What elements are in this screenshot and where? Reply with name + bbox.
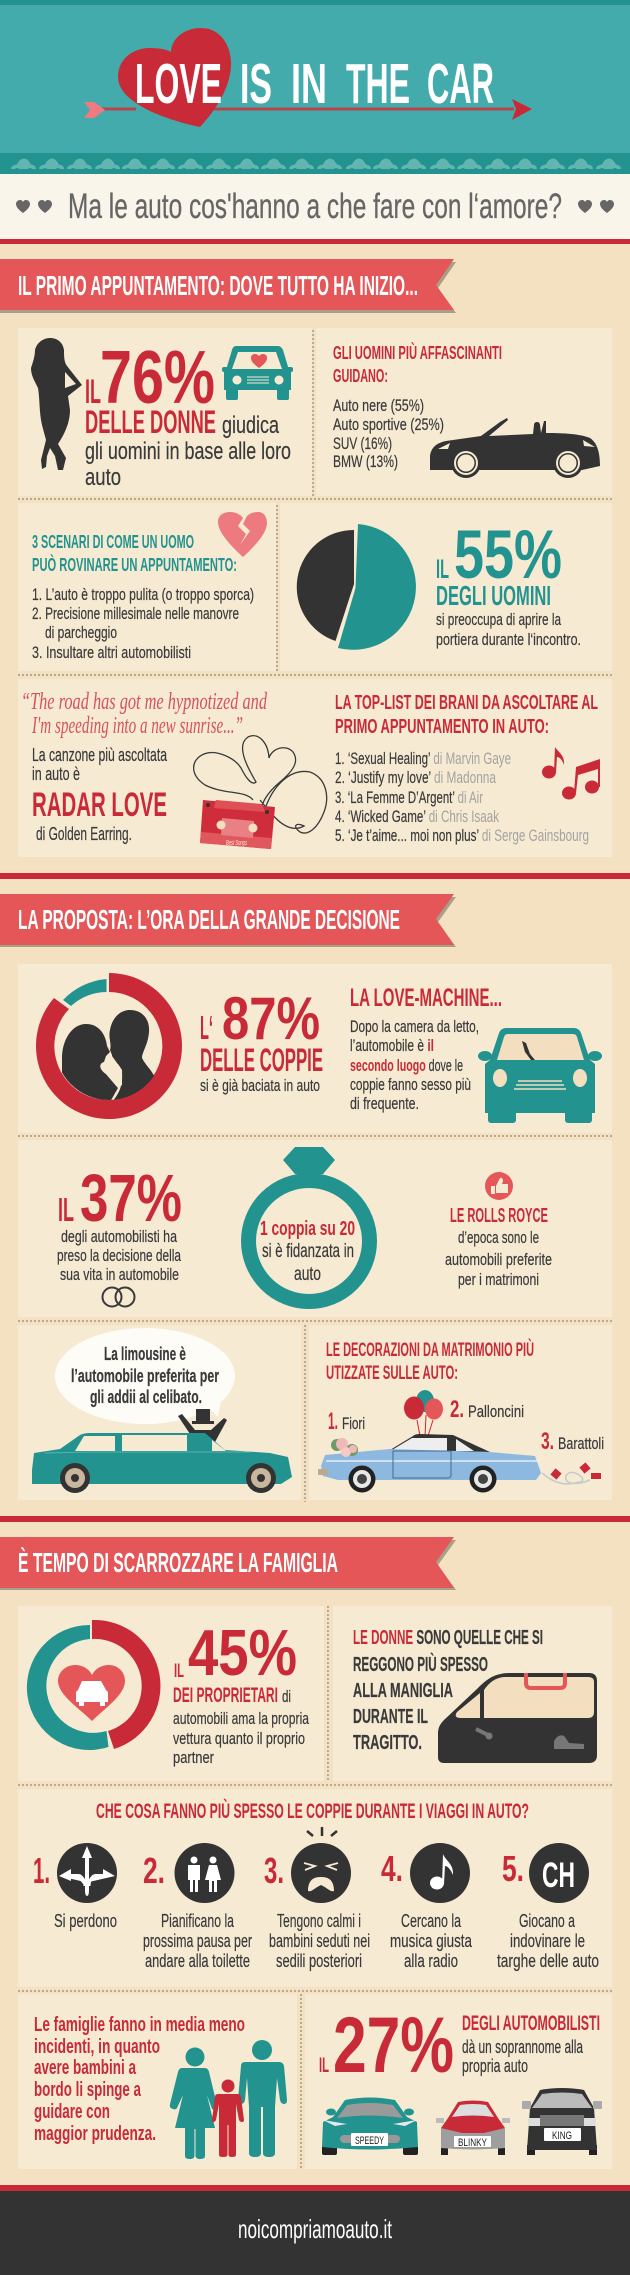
song list: 1. ‘Sexual Healing’ di Marvin Gaye [335,749,511,768]
text: vettura quanto il proprio [173,1729,305,1748]
text: maggior prudenza. [34,2123,156,2145]
item 4: musica: alla radio [404,1951,458,1971]
panel: 55 percent of men [297,516,581,650]
panel: 37 percent of drivers [57,1161,182,1306]
item 1: si perdono: 1. [33,1850,50,1891]
heading [333,342,502,386]
stat: il 76%: IL [85,373,101,411]
text: sua vita in automobile [60,1265,179,1284]
footer [0,2185,630,2275]
text: coppie fanno sesso più [350,1075,471,1094]
title: LOVE [135,52,222,116]
section ribbon: famiglia: È TEMPO DI SCARROZZARE LA FAMIGLIA [18,1547,338,1578]
text: judges men: giudica [222,412,279,439]
item 4: musica: musica giusta [390,1931,473,1951]
song text: di Golden Earring. [36,824,132,844]
icon: teal car speedy [322,2098,418,2155]
text: Le famiglie fanno in media meno [34,2014,245,2036]
icon: black truck king [522,2088,602,2155]
donut chart [36,973,182,1119]
item 2: pausa toilette: andare alla toilette [145,1951,250,1971]
text: secondo luogo dove le [350,1056,463,1075]
title [135,52,494,116]
bubble text: La limousine è [104,1344,186,1364]
icon: wedding rings [102,1288,134,1306]
list: SUV (16%) [333,434,392,453]
numbered list: 2. Precisione millesimale nelle manovre [32,604,239,623]
panel backgrounds and dividers section 2 [18,964,612,1502]
text: DURANTE IL [353,1706,428,1728]
arrow through heart [84,99,532,120]
panel: 3 scenarios [32,512,267,662]
item 3: bambini [264,1827,370,1971]
icon: car door [438,1673,597,1763]
list: Auto nere (55%) [333,396,424,415]
hearts right [578,200,614,213]
text [462,2037,584,2076]
section ribbon: primo appuntamento [0,259,456,313]
numbered list: 1. L’auto è troppo pulita (o troppo sporca) [32,585,254,604]
labels: Fiori [342,1414,365,1433]
icon: black truck king: KING [552,2130,572,2142]
text: propria auto [462,2056,528,2076]
section divider red [0,1516,630,1522]
panel: most charming men [333,342,600,478]
icon: music notes [542,747,600,800]
icon: tape ribbon [194,736,327,833]
text: partner [173,1748,214,1767]
text: ALLA MANIGLIA [353,1680,453,1702]
heading: GLI UOMINI PIÙ AFFASCINANTI [333,342,502,363]
text [353,1627,543,1754]
song text: in auto è [32,764,80,784]
text: automobili ama la propria [173,1709,309,1728]
icon: cans [542,1462,601,1484]
icon: balloons [404,1390,443,1436]
labels: 1. [328,1408,338,1435]
song list [335,749,589,845]
song text: La canzone più ascoltata [32,745,168,765]
panel: engagement ring [248,1147,370,1302]
item 2: pausa toilette: Pianificano la [161,1911,235,1931]
list [333,396,444,471]
bubble text [71,1344,219,1407]
icon: heart with car [58,1665,125,1721]
item 5: targhe [497,1843,599,1971]
text: bordo li spinge a [34,2079,142,2101]
text: avere bambini a [34,2057,137,2079]
panel: love machine [350,984,602,1123]
text: si preoccupa di aprire la [436,610,561,629]
panel: 27 percent nickname [319,2000,602,2155]
header banner [0,0,630,174]
item 2: pausa toilette: prossima pausa per [143,1931,252,1951]
icon: teal car with heart [222,346,293,400]
row of small cars [11,158,621,169]
panel backgrounds and dividers section 1 [18,328,612,857]
heading: UTIZZATE SULLE AUTO: [326,1363,458,1384]
item 1: si perdono [33,1843,117,1931]
stat: il 76%: DELLE DONNE [85,404,216,440]
item 4: musica: 4. [381,1848,403,1889]
icon: grey red car blinky [436,2100,510,2155]
stat: il 76% [85,335,216,440]
quote [21,689,268,739]
stat [173,1616,297,1707]
heading: GUIDANO: [333,366,388,386]
icon: kissing couple [62,1010,160,1102]
item 2: pausa toilette [143,1843,252,1971]
stat: IL [436,554,449,584]
text: incidenti, in quanto [34,2036,160,2058]
stat: DEGLI UOMINI [436,580,551,611]
speech bubble [55,1328,235,1424]
panel: engagement ring: si è fidanzata in [262,1241,354,1262]
text: l’automobile è il [350,1036,434,1055]
icon: teal car with legs [478,1028,602,1123]
panel: 76 percent of women [31,335,293,491]
icon: red cassette: Best Songs [226,840,247,847]
text [436,610,581,649]
stat: 55% [454,516,562,593]
pie chart [297,524,416,650]
icon: family [170,2040,287,2159]
labels: Barattoli [558,1434,604,1453]
text: Dopo la camera da letto, [350,1017,479,1036]
heading [32,532,237,575]
bubble text: gli addii al celibato. [90,1387,202,1407]
icon: broken heart [218,512,267,557]
item 4: musica: Cercano la [401,1911,462,1931]
icon: blue wedding car [318,1434,541,1492]
icon: red cassette [200,800,275,849]
footer url: noicompriamoauto.it [238,2214,393,2244]
heading: 3 SCENARI DI COME UN UOMO [32,532,194,552]
panel: radar love song [21,689,327,849]
panel: engagement ring: auto [294,1264,321,1285]
title: THE [346,52,410,116]
title: CAR [427,52,494,116]
icon: flowers [331,1438,358,1457]
stat: 87% [222,985,320,1052]
stat: IL [319,2054,329,2077]
text: judges men [85,412,291,491]
panel: what couples do [33,1799,599,1971]
labels: 3. [541,1428,554,1455]
text [445,1228,552,1289]
title heart [118,28,231,127]
numbered list: di parcheggio [45,623,117,642]
song list: 2. ‘Justify my love’ di Madonna [335,768,496,787]
section ribbon: famiglia [0,1537,456,1590]
song list: 3. ‘La Femme D’Argent’ di Air [335,788,483,807]
subtitle band [0,174,630,244]
list: BMW (13%) [333,452,398,471]
heading [335,692,598,738]
panel: limousine [32,1328,292,1493]
item 3: bambini: sedili posteriori [276,1951,362,1971]
text: automobili preferite [445,1250,552,1269]
panel: wedding decorations [318,1339,604,1492]
numbered list: 3. Insultare altri automobilisti [32,643,191,662]
icon: woman silhouette [31,338,82,470]
text: di [282,1687,291,1706]
numbered list [32,585,254,662]
stat: DELLE COPPIE [200,1042,323,1078]
item 5: targhe: Giocano a [519,1911,576,1931]
text: 1 coppia su 20 [260,1218,355,1240]
text: di frequente. [350,1094,419,1113]
item 3: bambini: bambini seduti nei [269,1931,370,1951]
song list: 4. ‘Wicked Game’ di Chris Isaak [335,807,499,826]
stat: 37% [80,1161,182,1236]
panel: rolls royce [445,1172,552,1289]
stat: IL [58,1191,74,1228]
stat: L‘ [200,1009,213,1046]
panel: 45 percent of owners [27,1616,309,1767]
section divider red [0,873,630,879]
heading: LA LOVE-MACHINE... [350,984,502,1012]
item 5: targhe: targhe delle auto [497,1951,599,1971]
stat [436,516,562,611]
stat [200,985,323,1078]
text: d’epoca sono le [458,1228,539,1247]
stat: il 76%: 76% [100,335,215,419]
stat: DEI PROPRIETARI [173,1684,278,1707]
heading: PUÒ ROVINARE UN APPUNTAMENTO: [32,554,237,575]
labels: Palloncini [468,1402,524,1421]
text: LE DONNE SONO QUELLE CHE SI [353,1627,543,1649]
text: preso la decisione della [57,1246,181,1265]
text: judges men: gli uomini in base alle loro [85,438,291,465]
quote: I'm speeding into a new sunrise...” [31,713,243,739]
text: si è già baciata in auto [200,1076,320,1095]
item 3: bambini: 3. [264,1850,284,1891]
icon: groom [178,1409,227,1453]
text: judges men: auto [85,464,121,491]
donut chart [27,1620,160,1750]
song text [32,745,168,844]
text [34,2014,245,2145]
song list: 5. ‘Je t’aime... moi non plus’ di Serge Gainsbourg [335,826,589,845]
labels [328,1396,604,1455]
quote: “The road has got me hypnotized and [21,689,268,715]
text: per i matrimoni [458,1270,539,1289]
text: guidare con [34,2101,110,2123]
title: IS [240,52,272,116]
icon: ring [248,1147,370,1302]
text: TRAGITTO. [353,1732,422,1754]
stat [319,2000,600,2089]
item 2: pausa toilette: 2. [143,1850,165,1891]
bubble text: l’automobile preferita per [71,1366,219,1386]
item 5: targhe: CH [542,1856,575,1895]
text: REGGONO PIÙ SPESSO [353,1652,488,1676]
text [57,1227,181,1284]
item 3: bambini: Tengono calmi i [277,1911,361,1931]
text [350,1017,479,1113]
icon: grey red car blinky: BLINKY [458,2137,487,2149]
text: degli automobilisti ha [61,1227,177,1246]
list: Auto sportive (25%) [333,415,444,434]
text [173,1687,309,1767]
hearts left [16,200,52,213]
panel: top-list songs [335,692,600,845]
panel: 87 percent of couples [36,973,323,1119]
labels: 2. [450,1396,464,1423]
panel: women hold the handle [353,1627,597,1763]
heading [326,1339,534,1384]
item 5: targhe: indovinare le [510,1931,585,1951]
icon: teal car speedy: SPEEDY [355,2135,384,2147]
panel: families [34,2014,287,2159]
item 5: targhe: 5. [502,1848,524,1889]
heading: LE ROLLS ROYCE [450,1205,548,1227]
stat: 45% [188,1616,297,1689]
panel backgrounds and dividers section 3 [18,1606,612,2170]
title: IN [291,52,327,116]
section ribbon: la proposta [0,894,456,947]
icon: black convertible [430,418,600,478]
item 4: musica [381,1843,473,1971]
item 1: si perdono: Si perdono [54,1911,117,1931]
text: portiera durante l‘incontro. [436,630,581,649]
song title: RADAR LOVE [32,786,167,824]
stat [58,1161,182,1236]
icon: teal limousine [32,1433,292,1493]
icon: thumbs up [485,1172,513,1200]
stat: 27% [333,2000,454,2089]
stat: IL [174,1661,184,1682]
